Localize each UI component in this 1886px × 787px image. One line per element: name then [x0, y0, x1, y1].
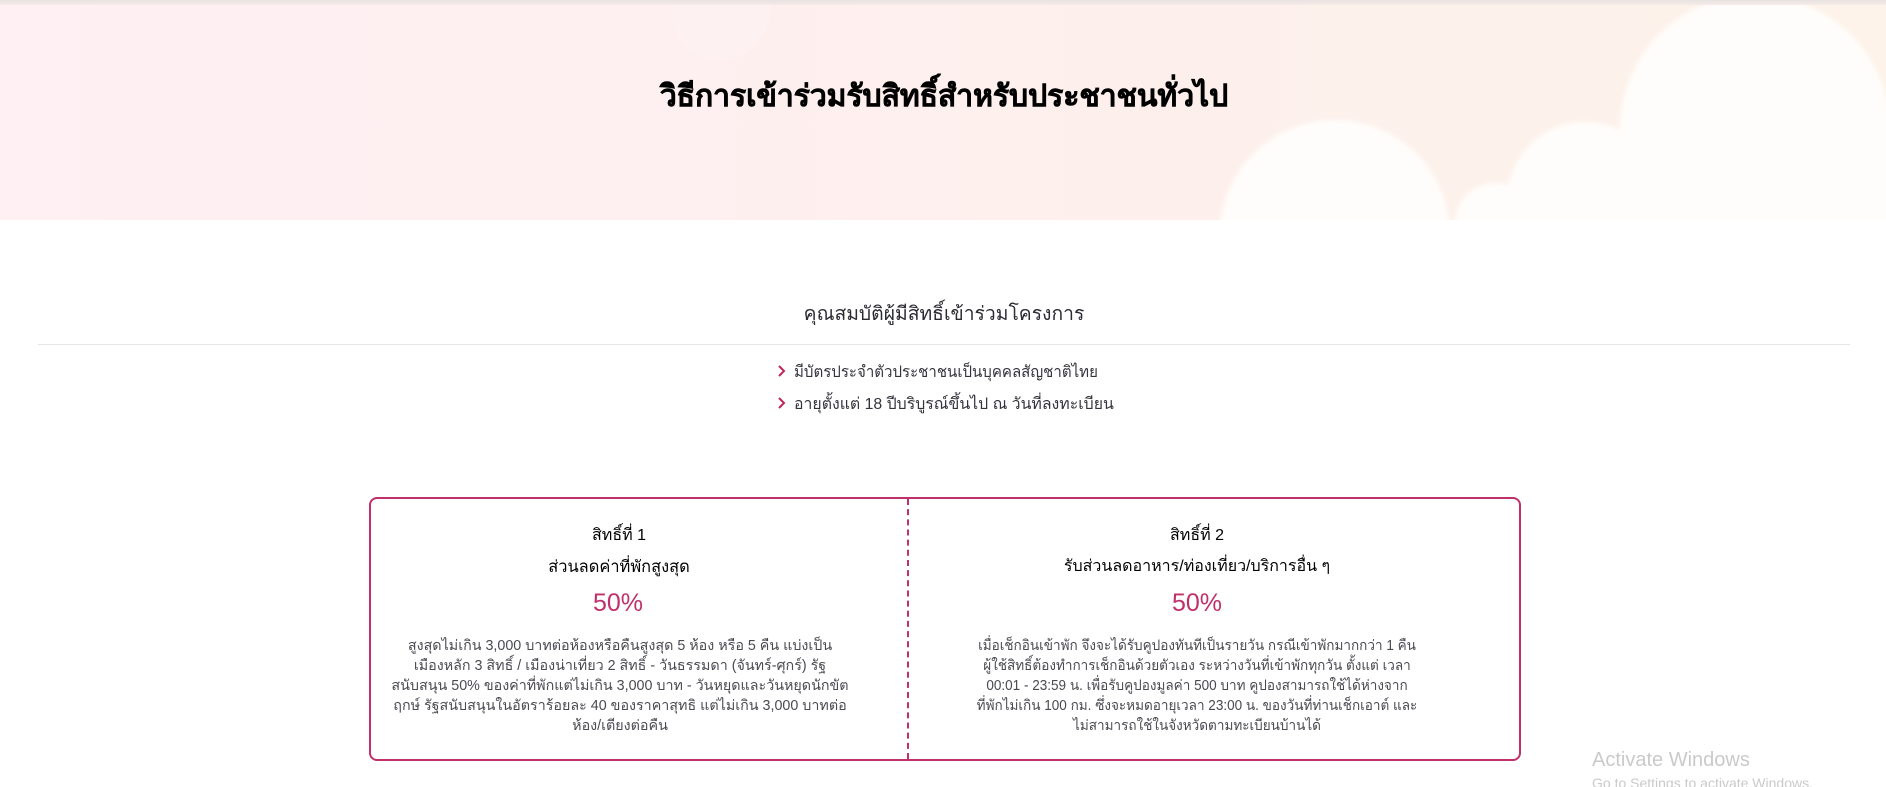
benefit 2 heading: รับส่วนลดอาหาร/ท่องเที่ยว/บริการอื่น ๆ: [1064, 558, 1330, 575]
benefit 1 label: สิทธิ์ที่ 1: [592, 527, 646, 544]
benefit 1 description: ห้อง/เตียงต่อคืน: [572, 718, 668, 734]
chevron icon 2: [778, 397, 786, 409]
eligibility list: [778, 362, 1114, 414]
Windows activation watermark: Activate Windows: [1592, 749, 1750, 771]
Windows activation watermark: [1592, 749, 1813, 787]
benefit 2 description: [977, 635, 1417, 734]
benefit 1 heading: ส่วนลดค่าที่พักสูงสุด: [548, 558, 690, 576]
dashed column divider: [907, 499, 909, 759]
cloud illustration: [1222, 5, 1886, 220]
benefit 1 description: เมืองหลัก 3 สิทธิ์ / เมืองน่าเที่ยว 2 สิทธิ์ - วันธรรมดา (จันทร์-ศุกร์) รัฐ: [414, 658, 826, 674]
benefit 2 description: เมื่อเช็กอินเข้าพัก จึงจะได้รับคูปองทันทีเป็นรายวัน กรณีเข้าพักมากกว่า 1 คืน: [978, 638, 1416, 654]
panel: benefits box: [369, 497, 1521, 761]
panel: benefit 1: [391, 523, 849, 734]
benefit 2 description: ที่พักไม่เกิน 100 กม. ซึ่งจะหมดอายุเวลา 23:00 น. ของวันที่ท่านเช็กเอาต์ และ: [977, 698, 1417, 714]
benefit 1 percentage: 50%: [593, 589, 643, 617]
chevron icon 1: [778, 365, 786, 377]
benefit 1 description: ฤกษ์ รัฐสนับสนุนในอัตราร้อยละ 40 ของราคาสุทธิ แต่ไม่เกิน 3,000 บาทต่อ: [393, 698, 847, 714]
benefit 1 description: สนับสนุน 50% ของค่าที่พักแต่ไม่เกิน 3,000 บาท - วันหยุดและวันหยุดนักขัต: [391, 678, 849, 694]
benefit 2 description: ผู้ใช้สิทธิ์ต้องทำการเช็กอินด้วยตัวเอง ระหว่างวันที่เข้าพักทุกวัน ตั้งแต่ เวลา: [983, 658, 1411, 674]
list item 1: มีบัตรประจำตัวประชาชนเป็นบุคคลสัญชาติไทย: [794, 364, 1098, 381]
benefit 2 description: 00:01 - 23:59 น. เพื่อรับคูปองมูลค่า 500 บาท คูปองสามารถใช้ได้ห่างจาก: [986, 678, 1408, 694]
header banner with clouds: [0, 0, 1886, 220]
eligibility heading: คุณสมบัติผู้มีสิทธิ์เข้าร่วมโครงการ: [804, 304, 1084, 325]
panel: benefit 2: [977, 523, 1417, 734]
benefit 1 description: [391, 636, 849, 734]
benefit 2 percentage: 50%: [1172, 589, 1222, 617]
title: วิธีการเข้าร่วมรับสิทธิ์สำหรับประชาชนทั่วไป: [660, 80, 1228, 113]
benefit 2 label: สิทธิ์ที่ 2: [1170, 527, 1224, 544]
benefit 2 description: ไม่สามารถใช้ในจังหวัดตามทะเบียนบ้านได้: [1073, 718, 1321, 734]
list item 2: อายุตั้งแต่ 18 ปีบริบูรณ์ขึ้นไป ณ วันที่ลงทะเบียน: [794, 396, 1114, 413]
divider: [38, 344, 1850, 345]
benefit 1 description: สูงสุดไม่เกิน 3,000 บาทต่อห้องหรือคืนสูงสุด 5 ห้อง หรือ 5 คืน แบ่งเป็น: [408, 638, 832, 654]
